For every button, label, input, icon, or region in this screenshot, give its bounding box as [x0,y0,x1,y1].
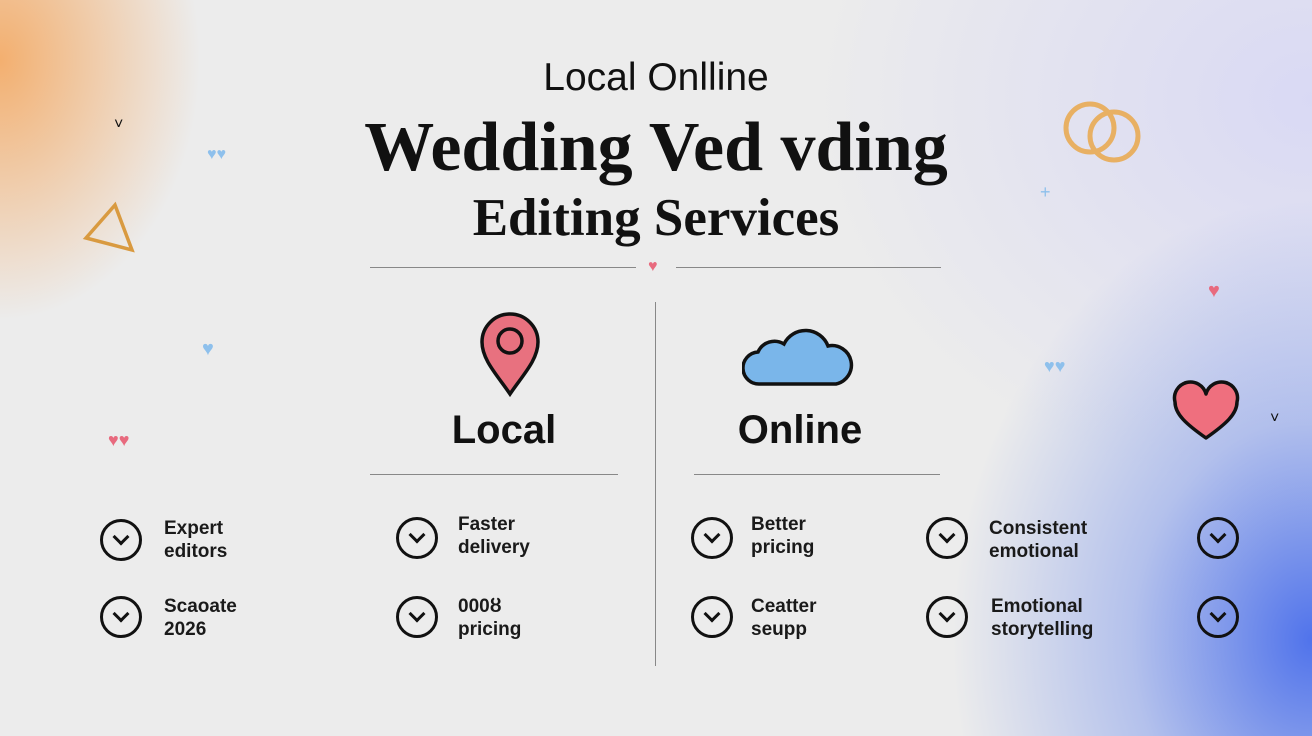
list items: Faster [458,514,515,535]
list items: Consistent [989,518,1087,539]
list items: Better [751,514,806,535]
decorations: + [1040,182,1051,202]
list items: Ceatter [751,596,816,617]
decorations: ♥ [1208,280,1220,302]
icon: cloud [742,328,854,386]
list items: Expert [164,518,223,539]
list items: delivery [458,537,530,558]
list items [100,514,1239,640]
list items: storytelling [991,619,1093,640]
decorations: ♥♥ [1044,356,1065,376]
decorations: ♥♥ [207,146,226,163]
icon: location pin [480,312,540,397]
list items: 2026 [164,619,206,640]
list items: editors [164,541,227,562]
subtitle: Local Onlline [543,56,769,99]
heading: Online: Online [738,408,862,452]
list items: pricing [458,619,521,640]
divider with heart: ♥ [648,258,658,275]
list items: emotional [989,541,1079,562]
icon: big heart [1172,380,1240,440]
list items: pricing [751,537,814,558]
icon: rings [1064,102,1140,162]
list items: seupp [751,619,807,640]
title line 2: Editing Services [473,189,839,247]
list items: 000ȣ [458,596,502,617]
title: Wedding Ved vding [364,109,948,186]
decorations: ♥ [202,338,214,360]
decorations: ˅ [114,116,123,133]
list items: Scaoate [164,596,237,617]
decorations: ˅ [1270,410,1279,427]
vertical divider [655,302,656,666]
heading: Local: Local [452,408,556,452]
decorations: ♥♥ [108,430,129,450]
list items: Emotional [991,596,1083,617]
